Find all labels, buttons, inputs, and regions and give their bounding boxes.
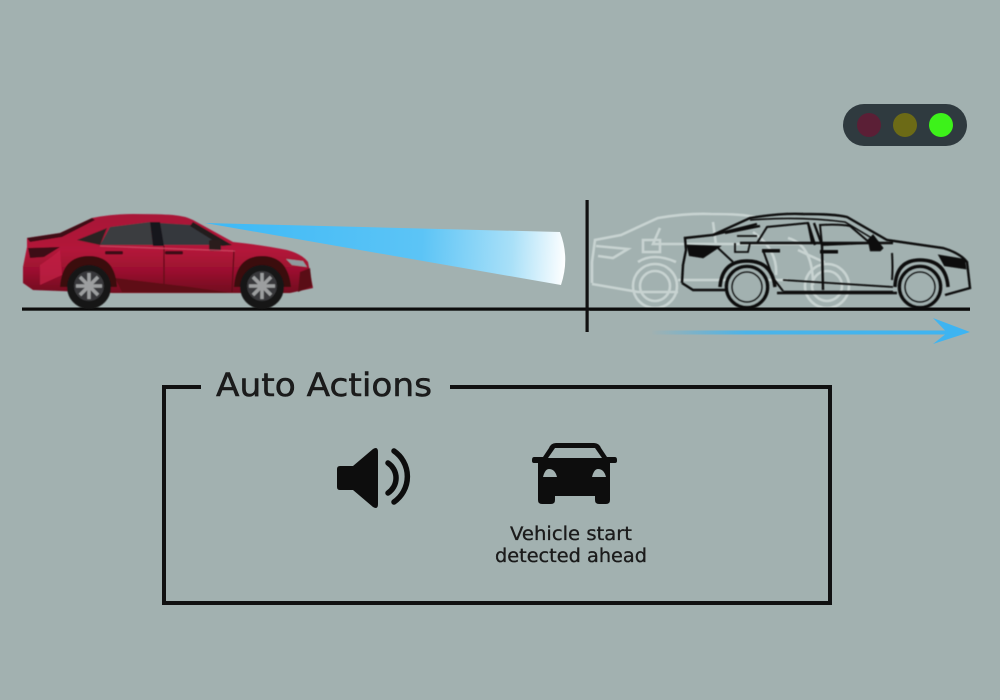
panel: auto actions: [164, 366, 830, 603]
ghost car outline: [592, 214, 849, 308]
panel heading: Auto Actions: [216, 366, 432, 404]
detection beam: [205, 223, 565, 285]
road line: [22, 308, 970, 311]
rear wheel: [67, 265, 111, 309]
outlined rear wheel: [726, 266, 768, 308]
red car: [23, 214, 313, 309]
icon: car front: [532, 443, 617, 504]
rear side window: [100, 222, 153, 245]
traffic light: [843, 104, 967, 146]
black outlined car: [682, 214, 970, 308]
motion arrow: [652, 318, 970, 344]
vertical stop line: [586, 200, 589, 332]
icon: speaker: [337, 448, 407, 508]
road line over wheels: [590, 308, 970, 311]
caption: [495, 524, 647, 567]
front side window: [160, 223, 227, 245]
outlined front wheel: [900, 266, 940, 308]
caption: detected ahead: [495, 546, 647, 567]
caption: Vehicle start: [510, 524, 632, 545]
front wheel: [240, 265, 284, 309]
